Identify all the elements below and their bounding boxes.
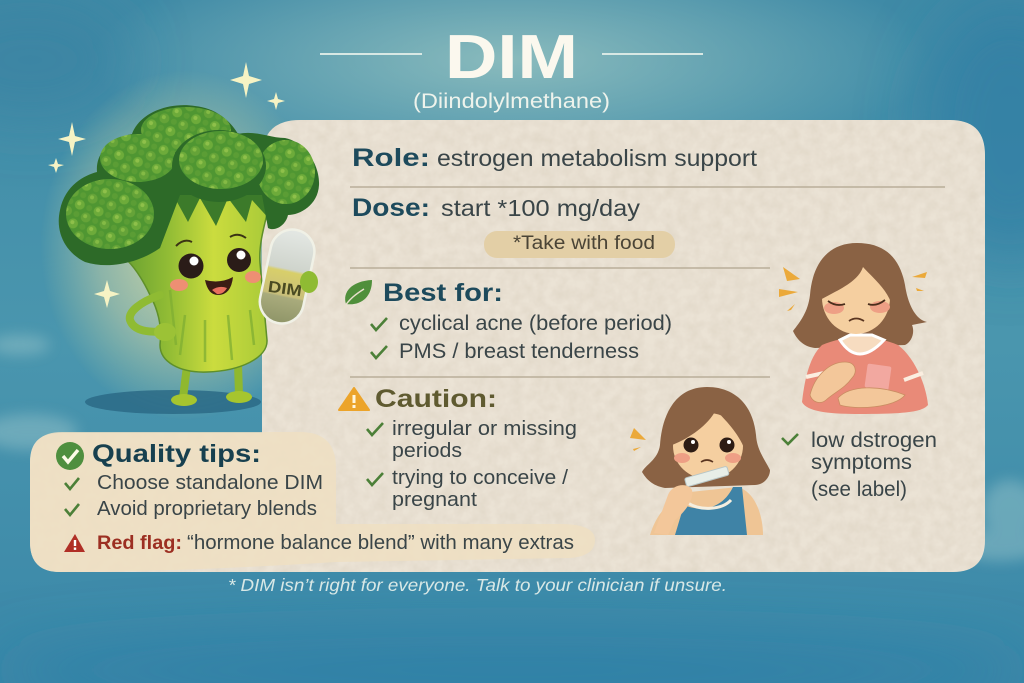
floret: right: [257, 140, 315, 204]
floret crown: [59, 105, 319, 265]
icon: quality check badge: [56, 442, 84, 470]
heading: caution: Caution:: [375, 385, 497, 413]
hair back: [642, 387, 770, 488]
hair fringe: [820, 248, 893, 308]
list: quality tips: Choose standalone DIM: [97, 472, 323, 494]
icon: leaf: [343, 280, 372, 309]
floret: left: [66, 179, 154, 249]
illustration: girl with test strip: [630, 387, 770, 535]
icon: sparkles: [48, 62, 285, 308]
hand and forearm: [654, 485, 692, 535]
illustration: girl with hands on chest: [779, 243, 928, 414]
collar: [688, 500, 731, 508]
hair fringe: [672, 393, 746, 450]
face: [673, 413, 743, 479]
floret: top: [141, 107, 231, 153]
list: low estrogen symptoms: (see label): [811, 478, 907, 501]
role row: [352, 144, 758, 172]
list: caution: irregular or missing: [392, 418, 577, 440]
heading: best for: Best for:: [383, 279, 503, 307]
list: low estrogen symptoms: [782, 429, 937, 501]
illustration: broccoli mascot: [59, 105, 319, 406]
motion marks: [779, 267, 927, 311]
capsule: [256, 225, 318, 328]
list: low estrogen symptoms: low dstrogen: [811, 429, 937, 452]
facial details: [824, 300, 890, 321]
list: best for: cyclical acne (before period): [399, 312, 672, 335]
red flag callout: Red flag:: [97, 533, 182, 554]
stalk: [113, 175, 275, 372]
role row: estrogen metabolism support: [437, 145, 758, 171]
pocket: [864, 363, 892, 391]
list: caution: trying to conceive /: [392, 467, 568, 489]
list: best for: [371, 312, 672, 363]
motion marks: [630, 428, 646, 451]
shirt: [802, 338, 928, 414]
crown silhouette: [59, 105, 319, 265]
legs and feet: [171, 364, 252, 406]
arm: [130, 295, 165, 332]
capsule label: DIM: [267, 279, 303, 300]
dose row: [352, 194, 641, 222]
face: [170, 235, 261, 295]
hand on capsule: [300, 271, 318, 293]
list: best for: PMS / breast tenderness: [399, 340, 639, 363]
crown shade: [130, 190, 272, 245]
collar: [840, 335, 884, 354]
hair back: [793, 243, 927, 348]
panel: quality tips background: [30, 432, 595, 572]
sleeve bands: [806, 373, 923, 380]
floret: upper left: [100, 134, 176, 182]
hand: [154, 323, 176, 341]
callout: take with food: *Take with food: [513, 233, 655, 254]
face: [822, 262, 890, 334]
callout: take with food: [484, 231, 675, 258]
red flag callout: “hormone balance blend” with many extras: [187, 532, 574, 554]
hands: [810, 362, 905, 408]
floret: center: [172, 130, 266, 202]
list: caution: periods: [392, 440, 462, 462]
dose row: start *100 mg/day: [441, 195, 641, 221]
list: caution: [367, 418, 577, 511]
facial details: [674, 438, 741, 463]
clouds: [0, 335, 1024, 561]
list: quality tips: Avoid proprietary blends: [97, 498, 317, 520]
heading: quality tips: Quality tips:: [92, 440, 261, 468]
broccoli glow: [40, 70, 330, 420]
test strip: [684, 466, 729, 487]
panel: main content card: [30, 120, 985, 572]
icon: caution triangle: [339, 388, 369, 410]
shoulders and arms: [650, 487, 763, 535]
list: caution: pregnant: [392, 489, 477, 511]
ground shadow: [85, 390, 261, 414]
stalk ribs: [170, 290, 254, 362]
list: low estrogen symptoms: symptoms: [811, 451, 912, 474]
dose row: Dose:: [352, 194, 430, 222]
footnote: * DIM isn’t right for everyone. Talk to your clinician if unsure.: [228, 575, 727, 595]
list: quality tips: [65, 472, 323, 520]
title: DIM: [445, 23, 578, 92]
tank top: [675, 487, 747, 535]
role row: Role:: [352, 144, 430, 172]
subtitle: (Diindolylmethane): [413, 90, 610, 113]
